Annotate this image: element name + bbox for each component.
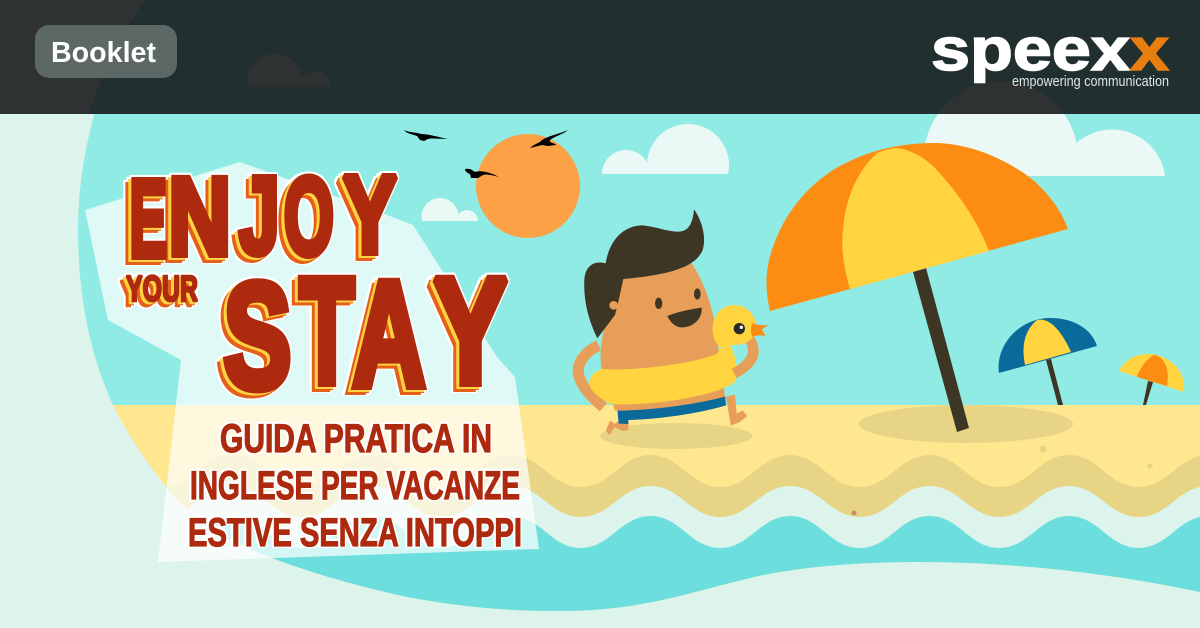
duck eye	[734, 323, 745, 334]
title line: stay: S	[224, 252, 292, 420]
bird 3	[465, 169, 499, 178]
bar cloud right	[938, 81, 1064, 114]
title line: enjoy: J	[239, 154, 280, 278]
sun	[476, 134, 580, 238]
ring	[589, 340, 737, 404]
wet sand wave	[166, 455, 1200, 611]
logo: speexx: speex x	[931, 16, 1169, 83]
pole	[913, 268, 969, 432]
title line: enjoy: Y	[343, 154, 397, 276]
ear	[609, 301, 618, 310]
umbrella shadow	[859, 405, 1073, 443]
water wave	[206, 516, 1200, 611]
subtitle line 2: INGLESE PER VACANZE	[190, 464, 520, 508]
subtitle line 3: ESTIVE SENZA INTOPPI	[188, 511, 522, 555]
character shadow	[600, 423, 752, 449]
title line: stay: T	[300, 246, 354, 414]
logo tagline: empowering communication	[1012, 74, 1169, 90]
body	[601, 263, 725, 411]
rear foot	[606, 420, 628, 435]
small umbrella	[1119, 354, 1184, 405]
sand	[113, 405, 1200, 611]
big umbrella	[766, 143, 1068, 432]
yellow panel	[842, 148, 989, 289]
birds	[404, 130, 568, 178]
translucent panel behind title	[85, 162, 539, 562]
bar cloud left	[248, 54, 332, 87]
title line: stay: Y	[434, 246, 508, 414]
bar left tint	[0, 0, 145, 114]
duck beak	[751, 323, 769, 337]
title line: stay: A	[352, 250, 426, 418]
front arm	[734, 337, 753, 373]
pebbles	[748, 434, 1153, 516]
hair	[584, 209, 704, 338]
canopy	[766, 143, 1068, 311]
cloud: small	[422, 198, 478, 221]
mouth	[667, 308, 702, 327]
badge: booklet	[35, 25, 177, 78]
cloud: centre	[602, 124, 729, 174]
cloud: right	[926, 114, 1165, 176]
blue umbrella	[999, 318, 1097, 405]
top bar	[0, 0, 1200, 114]
duck head	[713, 305, 756, 347]
bird 2	[530, 130, 568, 148]
title block	[126, 154, 508, 420]
subtitle	[188, 417, 522, 555]
bird 1	[404, 130, 448, 141]
sky	[78, 114, 1200, 405]
eyes	[655, 298, 662, 309]
back arm	[578, 345, 603, 407]
swim trunks	[617, 396, 726, 424]
foam wave	[186, 486, 1200, 611]
beach scene	[78, 114, 1200, 611]
title line: enjoy: E	[129, 158, 167, 280]
title line: enjoy: O	[284, 156, 334, 278]
title line: enjoy: N	[168, 156, 231, 278]
character with duck ring	[578, 209, 769, 435]
title line: your: YOUR	[126, 268, 198, 309]
badge: booklet: Booklet	[51, 37, 156, 69]
front leg	[726, 395, 747, 425]
subtitle line 1: GUIDA PRATICA IN	[220, 417, 492, 461]
